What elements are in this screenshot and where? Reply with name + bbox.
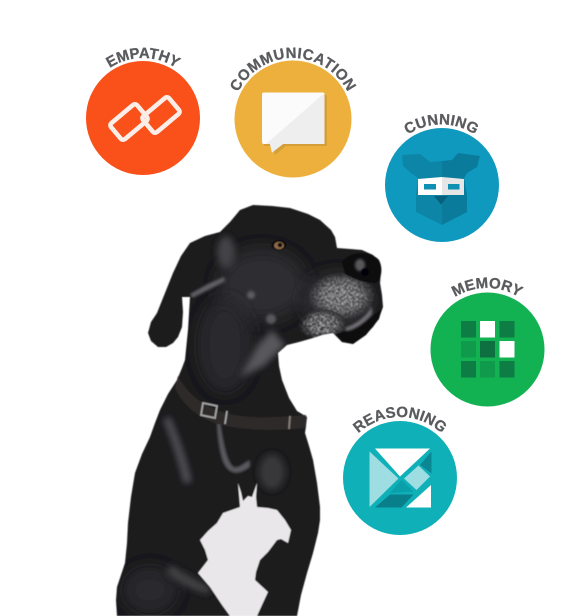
muzzle base: [304, 274, 372, 326]
icon: tangram: [370, 448, 432, 508]
speckled muzzle: [298, 272, 374, 338]
badge: communication: [230, 47, 356, 178]
label: communication: COMMUNICATION: [230, 47, 356, 92]
icon: chain links: [109, 96, 181, 141]
dog photo: [116, 205, 390, 616]
body highlights: [163, 416, 192, 484]
icon: memory grid: [461, 321, 514, 378]
label: reasoning: REASONING: [352, 406, 446, 433]
label: memory: MEMORY: [451, 277, 524, 297]
badge: empathy: [86, 48, 200, 175]
badge: memory: [430, 277, 544, 406]
icon: speech bubble: [262, 92, 327, 155]
badge: reasoning: [343, 406, 457, 535]
collar: [175, 376, 306, 430]
eye: [272, 240, 286, 250]
lower lip: [335, 306, 382, 344]
label: cunning: CUNNING: [404, 114, 478, 133]
icon: masked dog: [402, 153, 480, 225]
fur shading: [124, 236, 390, 612]
nose: [342, 253, 381, 283]
label: empathy: EMPATHY: [105, 48, 182, 68]
white chest patch: [198, 483, 291, 616]
badge: cunning: [385, 114, 499, 242]
